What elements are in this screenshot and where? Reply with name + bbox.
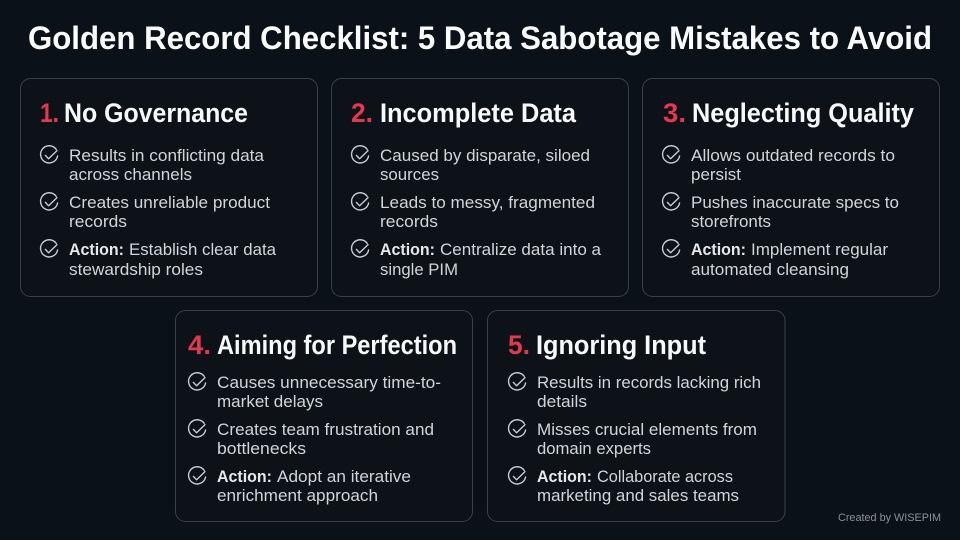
text: action: Adopt an iterative <box>277 467 411 486</box>
text: inaccurate specs: Pushes inaccurate specs to <box>691 193 899 212</box>
heading: 2. Incomplete Data: 2. <box>351 98 373 128</box>
text: conflicting data <box>69 146 265 184</box>
panel: 2. Incomplete Data <box>332 78 628 296</box>
text: action: single PIM <box>380 260 458 279</box>
heading: 5. Ignoring Input: 5. <box>508 330 530 360</box>
heading: 3. Neglecting Quality: Neglecting Quality <box>692 98 914 128</box>
icon: check 2 <box>189 420 206 437</box>
text: action: marketing and sales teams <box>537 486 739 505</box>
text: unreliable records: records <box>69 212 127 231</box>
icon: check 1 <box>509 373 526 390</box>
icon: check 2 <box>41 193 58 210</box>
text: action: Implement regular <box>751 240 888 259</box>
text: fragmented records: Leads to messy, fragmented <box>380 193 595 212</box>
text: domain experts <box>537 420 757 458</box>
heading: 5. Ignoring Input: Ignoring Input <box>536 330 706 360</box>
heading: 4. Aiming for Perfection: 4. <box>188 330 211 360</box>
text: action: Action: <box>380 240 435 259</box>
text: domain experts: domain experts <box>537 439 651 458</box>
text: action <box>69 240 277 279</box>
text: unreliable records <box>69 193 270 231</box>
icon: check 2 <box>663 193 680 210</box>
text: action: stewardship roles <box>69 260 203 279</box>
text: action: Action: <box>217 467 272 486</box>
text: rich details: Results in records lacking rich <box>537 373 761 392</box>
heading: 4. Aiming for Perfection: Aiming for Perfection <box>217 330 457 360</box>
text: action: Centralize data into a <box>440 240 602 259</box>
icon: check 3 <box>663 240 680 257</box>
text: delays: market delays <box>217 392 323 411</box>
text: unreliable records: Creates unreliable product <box>69 193 270 212</box>
text: frustration: bottlenecks <box>217 439 306 458</box>
heading: 1. No Governance: 1. <box>40 98 59 128</box>
text: action: Action: <box>537 467 592 486</box>
heading: 3. Neglecting Quality: 3. <box>663 98 686 128</box>
text: action: automated cleansing <box>691 260 849 279</box>
icon: check 1 <box>663 146 680 163</box>
text: rich details <box>537 373 761 411</box>
text: delays: Causes unnecessary time-to- <box>217 373 441 392</box>
panel: 3. Neglecting Quality <box>642 78 940 296</box>
text: inaccurate specs: storefronts <box>691 212 771 231</box>
text: action <box>217 467 411 505</box>
text: conflicting data: across channels <box>69 165 192 184</box>
text: fragmented records <box>380 193 595 231</box>
text: action: Establish clear data <box>129 240 277 259</box>
icon: check 2 <box>352 193 369 210</box>
footer credit: Created by WISEPIM <box>838 512 941 524</box>
icon: check 3 <box>509 467 526 484</box>
text: outdated records <box>691 146 895 184</box>
text: action: Action: <box>691 240 746 259</box>
icon: check 3 <box>189 467 206 484</box>
icon: check 3 <box>352 240 369 257</box>
text: action <box>380 240 602 279</box>
text: action <box>691 240 888 279</box>
text: fragmented records: records <box>380 212 438 231</box>
text: action <box>537 467 739 505</box>
heading: 1. No Governance: No Governance <box>64 98 248 128</box>
text: siloed sources <box>380 146 590 184</box>
text: siloed sources: Caused by disparate, siloed <box>380 146 590 165</box>
text: outdated records: persist <box>691 165 741 184</box>
icon: check 1 <box>189 373 206 390</box>
text: action: Action: <box>69 240 124 259</box>
panel: 1. No Governance <box>20 78 318 296</box>
text: outdated records: Allows outdated records to <box>691 146 895 165</box>
text: delays <box>217 373 441 411</box>
text: action: enrichment approach <box>217 486 378 505</box>
icon: check 1 <box>41 146 58 163</box>
icon: check 3 <box>41 240 58 257</box>
text: frustration <box>217 420 434 458</box>
panel: 5. Ignoring Input <box>488 310 785 522</box>
text: conflicting data: Results in conflicting data <box>69 146 265 165</box>
text: siloed sources: sources <box>380 165 439 184</box>
heading: 2. Incomplete Data: Incomplete Data <box>380 98 576 128</box>
icon: check 2 <box>509 420 526 437</box>
text: inaccurate specs <box>691 193 899 231</box>
text: action: Collaborate across <box>597 467 733 486</box>
text: frustration: Creates team frustration and <box>217 420 434 439</box>
panel: 4. Aiming for Perfection <box>176 310 472 522</box>
icon: check 1 <box>352 146 369 163</box>
text: domain experts: Misses crucial elements from <box>537 420 757 439</box>
text: rich details: details <box>537 392 587 411</box>
title: Golden Record Checklist: 5 Data Sabotage Mistakes to Avoid <box>28 20 932 56</box>
